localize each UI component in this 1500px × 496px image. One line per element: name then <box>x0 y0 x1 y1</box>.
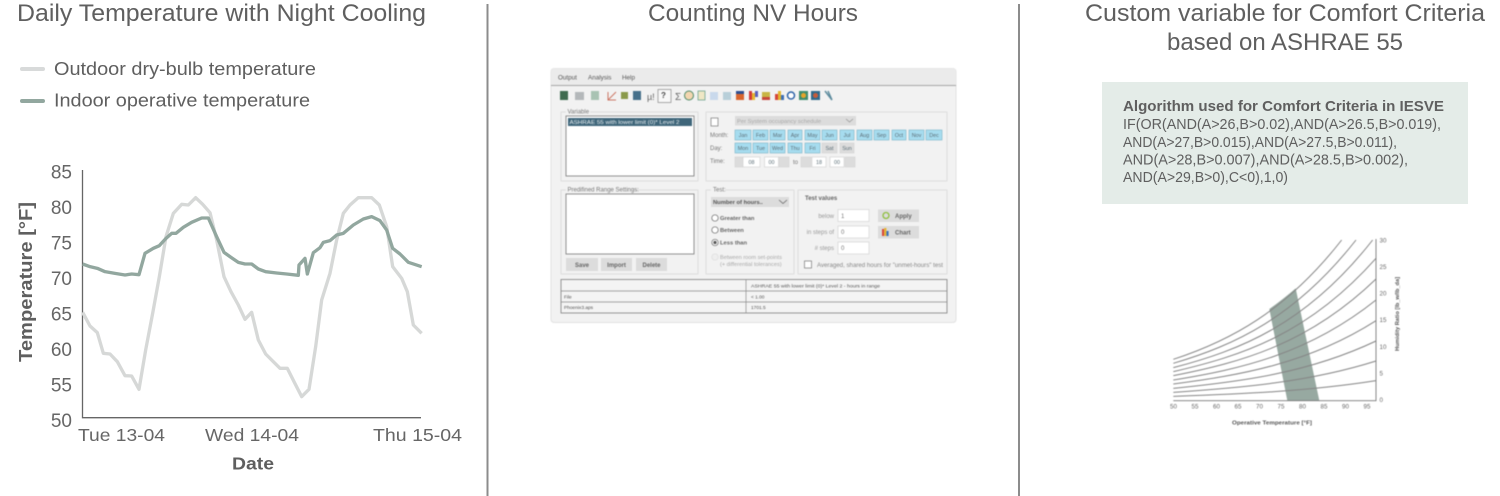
y axis ticks: 80 <box>51 198 72 219</box>
toolbar icons: µ! <box>647 92 655 102</box>
menu bar: Help <box>622 74 635 82</box>
x axis title: Date <box>232 454 274 474</box>
month buttons: Aug <box>860 133 869 139</box>
y axis ticks: 60 <box>51 340 72 361</box>
chart button <box>878 226 919 238</box>
test group: Greater than <box>720 216 755 222</box>
title: custom variable: based on ASHRAE 55 <box>1167 29 1403 56</box>
y axis ticks: 85 <box>51 162 72 184</box>
test values group: # steps <box>815 246 834 252</box>
month buttons: Sep <box>877 133 886 139</box>
callout: algorithm: AND(A>29,B>0),C<0),1,0) <box>1123 169 1288 186</box>
y axis ticks: 70 <box>51 269 72 290</box>
toolbar icons: ? <box>661 91 666 100</box>
x axis ticks: 55 <box>1192 404 1199 410</box>
time inputs: 08 <box>748 160 754 166</box>
series: outdoor dry-bulb <box>83 198 422 397</box>
predefined range settings: Import <box>607 263 626 269</box>
month buttons: Dec <box>929 133 939 139</box>
schedule group: Month: <box>710 133 729 139</box>
test values group: 1 <box>841 214 845 220</box>
predefined range settings <box>561 188 698 274</box>
x axis title: Operative Temperature [°F] <box>1232 420 1312 426</box>
y axis ticks: 30 <box>1380 238 1387 244</box>
results table: File <box>564 294 572 300</box>
day buttons: Sat <box>825 146 834 152</box>
month buttons: Feb <box>756 133 765 139</box>
month buttons: Nov <box>912 133 922 139</box>
comfort zone and humidity curves <box>1173 239 1376 401</box>
menu bar <box>551 68 956 86</box>
x axis ticks: 70 <box>1256 404 1263 410</box>
y axis ticks: 75 <box>51 234 72 254</box>
variable group: Variable <box>568 110 590 116</box>
legend item: indoor: Indoor operative temperature <box>54 90 310 110</box>
x axis ticks: 50 <box>1170 404 1177 410</box>
y axis ticks: 25 <box>1380 264 1387 271</box>
x axis ticks: 85 <box>1321 404 1328 410</box>
x axis ticks: 75 <box>1278 404 1285 410</box>
month buttons: Jan <box>739 133 747 139</box>
month buttons <box>735 130 942 140</box>
time inputs: 18 <box>816 160 822 166</box>
window frame <box>551 68 956 322</box>
time inputs <box>735 157 855 167</box>
test values group: 0 <box>841 246 845 252</box>
menu bar: Analysis <box>588 74 611 82</box>
x axis ticks: 90 <box>1342 404 1349 410</box>
x axis ticks <box>1170 404 1371 410</box>
schedule group: Per System occupancy schedule <box>737 119 821 125</box>
month buttons: Jul <box>844 133 850 139</box>
test group: Test: <box>713 188 726 194</box>
results table: < 1.00 <box>751 294 765 300</box>
test values group: below <box>818 214 835 220</box>
x axis ticks: 80 <box>1299 404 1306 410</box>
test group: Between <box>720 228 744 234</box>
variable group: ASHRAE 55 with lower limit (0)* Level 2 <box>570 120 680 126</box>
y axis ticks: 15 <box>1380 317 1387 324</box>
results table: 1701.5 <box>751 305 766 311</box>
test group: Number of hours.. <box>713 200 763 206</box>
test group <box>706 188 794 274</box>
x axis ticks: Tue 13-04 <box>78 425 165 445</box>
test group: Less than <box>720 240 748 246</box>
x axis ticks: Thu 15-04 <box>373 425 462 445</box>
x axis ticks <box>78 425 462 445</box>
title: counting NV hours: Counting NV Hours <box>648 0 858 27</box>
y axis ticks: 55 <box>51 376 72 396</box>
results table: ASHRAE 55 with lower limit (0)* Level 2 - hours in range <box>751 284 880 290</box>
y axis ticks <box>1380 238 1387 404</box>
schedule group <box>706 112 947 181</box>
title: daily temperature: Daily Temperature with Night Cooling <box>17 0 426 27</box>
y axis ticks <box>51 162 72 432</box>
predefined range settings: Delete <box>642 263 661 269</box>
legend item: outdoor: Outdoor dry-bulb temperature <box>54 58 316 79</box>
results table: Phoenix3.aps <box>564 305 594 311</box>
callout: algorithm: AND(A>28,B>0.007),AND(A>28.5,B>0.002), <box>1123 152 1408 168</box>
x axis ticks: 95 <box>1364 404 1371 410</box>
callout: algorithm: Algorithm used for Comfort Criteria in IESVE <box>1123 98 1444 115</box>
y axis ticks: 65 <box>51 304 72 326</box>
chart button: Chart <box>895 230 911 236</box>
y axis ticks: 0 <box>1380 397 1384 404</box>
month buttons: Mar <box>773 133 782 139</box>
legend <box>22 58 316 110</box>
comfort zone band <box>1269 288 1319 401</box>
results table <box>561 280 947 313</box>
test values group: Test values <box>805 196 838 202</box>
y axis ticks: 50 <box>51 411 72 432</box>
panel: daily temperature <box>16 0 462 474</box>
day buttons: Mon <box>738 146 748 152</box>
y axis ticks: 20 <box>1380 290 1387 298</box>
day buttons: Thu <box>790 146 800 152</box>
test group: Between room set-points <box>720 255 782 261</box>
panel: counting NV hours <box>551 0 956 322</box>
toolbar icons: Σ <box>675 92 681 103</box>
day buttons: Tue <box>756 146 765 152</box>
y axis title: Temperature [°F] <box>16 202 36 362</box>
chart axes <box>1173 239 1376 401</box>
software screenshot <box>551 68 956 322</box>
callout: algorithm <box>1102 82 1468 204</box>
apply button: Apply <box>895 214 912 220</box>
toolbar icons <box>560 90 832 103</box>
month buttons: Oct <box>895 133 904 139</box>
predefined range settings: Save <box>575 263 590 269</box>
apply button <box>878 210 919 222</box>
month buttons: Jun <box>825 133 834 139</box>
day buttons: Wed <box>772 146 783 152</box>
y axis title: Humidity Ratio [lb_w/lb_da] <box>1395 277 1401 351</box>
menu bar: Output <box>558 74 577 82</box>
x axis ticks: 60 <box>1213 404 1220 410</box>
psychrometric chart <box>1170 238 1401 426</box>
series: indoor operative <box>83 217 422 275</box>
x axis ticks: Wed 14-04 <box>205 425 299 445</box>
time inputs: 00 <box>834 160 840 166</box>
y axis ticks: 5 <box>1380 370 1384 378</box>
time inputs: 00 <box>768 160 774 166</box>
callout: algorithm: IF(OR(AND(A>26,B>0.02),AND(A>26.5,B>0.019), <box>1123 116 1441 133</box>
x axis ticks: 65 <box>1235 404 1242 410</box>
month buttons: May <box>807 133 818 139</box>
day buttons: Fri <box>809 146 816 152</box>
schedule group: Day: <box>710 146 723 152</box>
panel: custom variable for comfort criteria <box>1085 0 1486 426</box>
test group: (+ differential tolerances) <box>720 262 782 268</box>
humidity curves <box>1173 240 1376 396</box>
chart axes <box>82 170 421 418</box>
predefined range settings: Predifined Range Settings: <box>568 188 639 194</box>
y axis ticks: 10 <box>1380 344 1387 351</box>
day buttons: Sun <box>842 146 852 152</box>
month buttons: Apr <box>791 133 799 139</box>
callout: algorithm: AND(A>27,B>0.015),AND(A>27.5,B>0.011), <box>1123 134 1397 151</box>
title: custom variable: Custom variable for Comfort Criteria <box>1085 0 1486 27</box>
schedule group: Time: <box>710 159 725 165</box>
time inputs: to <box>793 160 799 166</box>
test values group: 0 <box>841 230 845 236</box>
variable group <box>561 110 698 181</box>
test values group: Averaged, shared hours for "unmet-hours" test <box>817 263 943 269</box>
line chart: temperature over three days <box>16 162 462 474</box>
test values group <box>798 190 947 274</box>
test values group: in steps of <box>807 230 834 236</box>
title: custom variable <box>1085 0 1486 56</box>
day buttons <box>735 143 854 153</box>
